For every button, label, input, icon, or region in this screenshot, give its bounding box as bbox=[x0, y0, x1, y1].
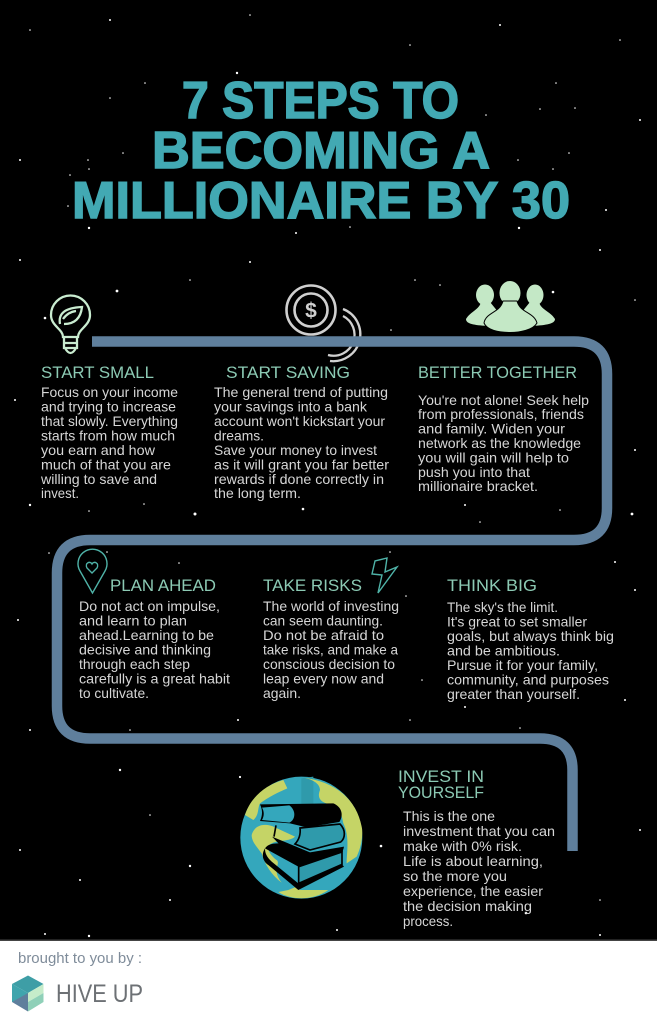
step 7: invest in yourself: investment that you can bbox=[403, 823, 555, 839]
icon: dollar coin: $ bbox=[305, 300, 317, 322]
step 1: start small: and trying to increase bbox=[41, 398, 176, 414]
step 7: invest in yourself: This is the one bbox=[403, 808, 495, 824]
step 4: plan ahead: ahead.Learning to be bbox=[79, 627, 214, 643]
step 3: better together: millionaire bracket. bbox=[418, 478, 538, 494]
step 2: start saving: your savings into a bank bbox=[214, 398, 368, 414]
step 7: invest in yourself: make with 0% risk. bbox=[403, 838, 522, 854]
step 1: start small: you earn and how bbox=[41, 442, 156, 458]
step 1: start small: Focus on your income bbox=[41, 384, 178, 400]
step 1: start small: that slowly. Everything bbox=[41, 413, 178, 429]
step 7: invest in yourself: so the more you bbox=[403, 868, 507, 884]
step 4: plan ahead: and learn to plan bbox=[79, 612, 187, 628]
hive up wordmark: HIVE UP bbox=[56, 980, 143, 1008]
step 1: start small: starts from how much bbox=[41, 428, 175, 444]
step 5: take risks: take risks, and make a bbox=[263, 642, 398, 658]
step 5: take risks: again. bbox=[263, 685, 301, 701]
title: MILLIONAIRE BY 30 bbox=[72, 172, 570, 230]
step 6: think big: goals, but always think big bbox=[447, 628, 614, 644]
step 7: invest in yourself: INVEST IN bbox=[398, 767, 484, 786]
step 3: better together: BETTER TOGETHER bbox=[418, 363, 577, 382]
step 6: think big: It's great to set smaller bbox=[447, 614, 587, 630]
step 2: start saving: The general trend of putting bbox=[214, 384, 388, 400]
step 6: think big: THINK BIG bbox=[447, 576, 537, 595]
step 1: start small: much of that you are bbox=[41, 456, 171, 472]
step 3: better together: You're not alone! Seek help bbox=[418, 392, 589, 408]
footer band bbox=[0, 940, 657, 1024]
icon: location pin with heart bbox=[78, 549, 107, 593]
icon: three people bbox=[466, 281, 555, 332]
step 3: better together: from professionals, friends bbox=[418, 406, 584, 422]
step 2: start saving: as it will grant you far better bbox=[214, 456, 389, 472]
step 1: start small: invest. bbox=[41, 485, 79, 501]
step 1: start small: START SMALL bbox=[41, 363, 154, 382]
step 3: better together: you will gain will help to bbox=[418, 450, 569, 466]
winding path bbox=[57, 342, 607, 851]
step 4: plan ahead: through each step bbox=[79, 656, 190, 672]
step 2: start saving: the long term. bbox=[214, 485, 301, 501]
step 3: better together bbox=[418, 363, 589, 494]
step 6: think big bbox=[447, 576, 614, 702]
icon: lightning bolt bbox=[372, 558, 397, 593]
step 7: invest in yourself: the decision making bbox=[403, 898, 532, 914]
step 2: start saving: START SAVING bbox=[226, 363, 350, 382]
step 6: think big: community, and purposes bbox=[447, 672, 609, 688]
step 5: take risks: leap every now and bbox=[263, 670, 384, 686]
step 3: better together: and family. Widen your bbox=[418, 420, 565, 436]
step 5: take risks: TAKE RISKS bbox=[263, 576, 362, 595]
icon: dollar coin bbox=[286, 286, 336, 334]
step 5: take risks: conscious decision to bbox=[263, 656, 395, 672]
step 4: plan ahead: to cultivate. bbox=[79, 685, 149, 701]
title: BECOMING A bbox=[152, 122, 490, 180]
step 5: take risks: The world of investing bbox=[263, 598, 399, 614]
step 6: think big: and be ambitious. bbox=[447, 642, 560, 658]
icon: light bulb with leaf bbox=[51, 296, 90, 353]
step 7: invest in yourself: Life is about learning, bbox=[403, 853, 543, 869]
step 5: take risks: Do not be afraid to bbox=[263, 627, 384, 643]
step 7: invest in yourself: process. bbox=[403, 913, 453, 929]
step 2: start saving: rewards if done correctly in bbox=[214, 471, 384, 487]
step 3: better together: network as the knowledge bbox=[418, 435, 581, 451]
icon: books on globe bbox=[240, 777, 362, 899]
icon: hive up cube logo bbox=[12, 976, 44, 1012]
step 5: take risks: can seem daunting. bbox=[263, 612, 383, 628]
icon: coin arcs (behind path) bbox=[328, 309, 360, 361]
step 5: take risks bbox=[263, 576, 399, 701]
step 4: plan ahead: decisive and thinking bbox=[79, 642, 211, 658]
step 3: better together: push you into that bbox=[418, 464, 530, 480]
step 4: plan ahead: carefully is a great habit bbox=[79, 670, 230, 686]
title: 7 STEPS TO bbox=[182, 72, 459, 130]
title bbox=[72, 72, 570, 230]
step 4: plan ahead: PLAN AHEAD bbox=[110, 576, 216, 595]
step 7: invest in yourself bbox=[398, 767, 555, 929]
footer credit text: brought to you by : bbox=[18, 951, 142, 967]
step 4: plan ahead bbox=[79, 576, 230, 701]
step 2: start saving bbox=[214, 363, 389, 501]
step 2: start saving: account won't kickstart your bbox=[214, 413, 385, 429]
step 6: think big: The sky's the limit. bbox=[447, 599, 558, 615]
step 7: invest in yourself: YOURSELF bbox=[398, 783, 484, 802]
step 2: start saving: dreams. bbox=[214, 428, 264, 444]
step 6: think big: Pursue it for your family, bbox=[447, 657, 598, 673]
step 7: invest in yourself: experience, the easier bbox=[403, 883, 543, 899]
step 1: start small: willing to save and bbox=[40, 471, 157, 487]
step 4: plan ahead: Do not act on impulse, bbox=[79, 598, 220, 614]
step 6: think big: greater than yourself. bbox=[447, 686, 580, 702]
step 1: start small bbox=[40, 363, 178, 501]
step 2: start saving: Save your money to invest bbox=[214, 442, 377, 458]
